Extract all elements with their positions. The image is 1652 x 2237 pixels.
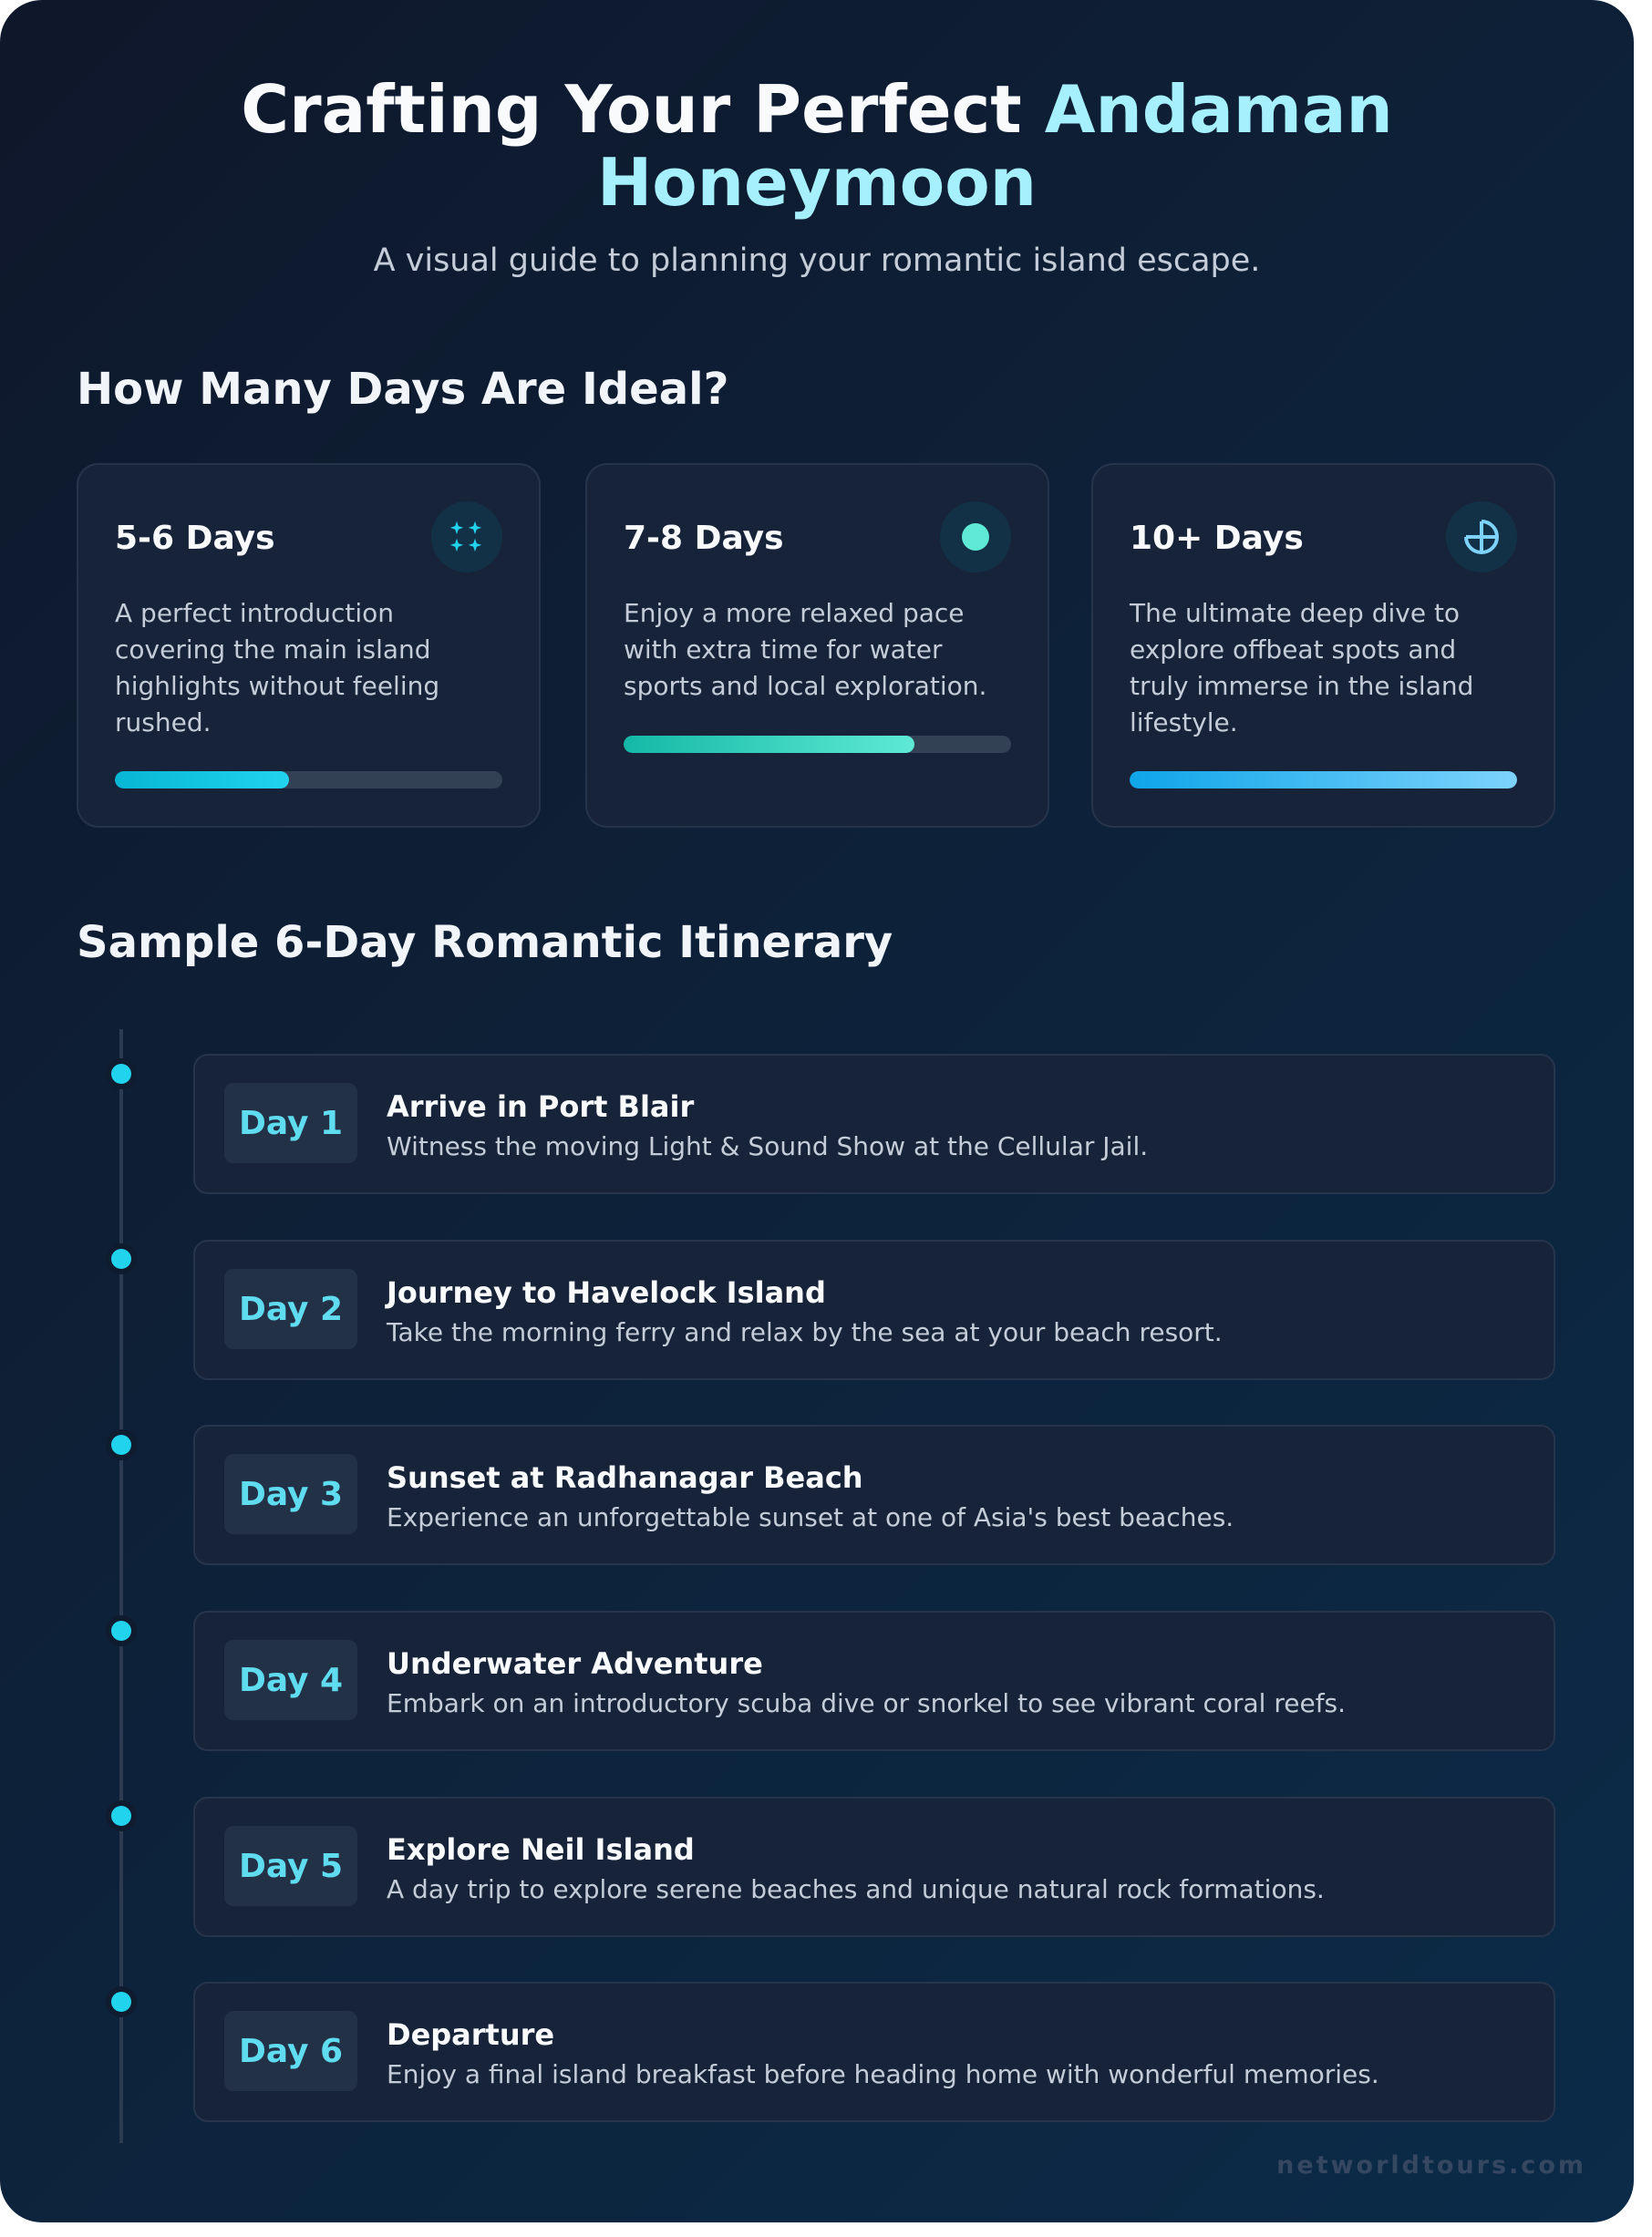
day 6: Day 6 [239, 2033, 343, 2069]
dot 5 [111, 1806, 131, 1826]
progress bar [624, 736, 1011, 753]
day 6: Departure [387, 2017, 554, 2052]
day 3: Day 3 [239, 1475, 343, 1513]
panel: 7-8 days: Enjoy a more relaxed pace with extra time for water sports and local exploration. [624, 598, 986, 701]
day 1 [193, 1054, 1555, 1194]
icon: sparkles [431, 501, 502, 572]
day 1: Day 1 [239, 1105, 343, 1141]
panel: 5-6 days: A perfect introduction covering the main island highlights without feeling rushed. [115, 598, 439, 737]
day 1: Arrive in Port Blair [387, 1089, 694, 1124]
day 5: A day trip to explore serene beaches and unique natural rock formations. [387, 1874, 1325, 1904]
footer: networldtours.com [1276, 2151, 1586, 2180]
title: Crafting Your Perfect Andaman [241, 71, 1393, 148]
icon: globe [1446, 501, 1517, 572]
dot 4 [111, 1621, 131, 1641]
progress bar [115, 771, 502, 789]
day 6 [193, 1982, 1555, 2122]
day 5: Explore Neil Island [387, 1832, 695, 1867]
day 6: Enjoy a final island breakfast before heading home with wonderful memories. [387, 2059, 1379, 2089]
panel: 7-8 days: 7-8 Days [624, 520, 784, 557]
day 1: Witness the moving Light & Sound Show at the Cellular Jail. [387, 1131, 1148, 1161]
timeline line [119, 1029, 123, 2143]
day 3: Sunset at Radhanagar Beach [387, 1460, 863, 1495]
day 2: Take the morning ferry and relax by the sea at your beach resort. [387, 1317, 1223, 1347]
panel: 5-6 days: 5-6 Days [115, 520, 275, 557]
panel: 10+ days: 10+ Days [1130, 520, 1304, 557]
panel: 5-6 days [77, 463, 541, 828]
day 2: Day 2 [239, 1291, 343, 1327]
icon: circle [940, 501, 1011, 572]
heading: how many days: How Many Days Are Ideal? [77, 364, 728, 415]
dot 2 [111, 1249, 131, 1269]
panel: 7-8 days [585, 463, 1049, 828]
day 2 [193, 1240, 1555, 1380]
day 5: Day 5 [239, 1847, 343, 1885]
panel: 10+ days: The ultimate deep dive to explore offbeat spots and truly immerse in the island lifestyle. [1130, 598, 1473, 737]
dot 6 [111, 1992, 131, 2012]
panel: 10+ days [1091, 463, 1555, 828]
progress bar [1130, 771, 1517, 789]
day 5 [193, 1797, 1555, 1937]
dot 3 [111, 1435, 131, 1455]
subtitle: A visual guide to planning your romantic island escape. [374, 242, 1260, 279]
dot 1 [111, 1064, 131, 1084]
day 3 [193, 1425, 1555, 1565]
day 2: Journey to Havelock Island [387, 1275, 826, 1310]
day 4: Underwater Adventure [387, 1646, 763, 1681]
day 3: Experience an unforgettable sunset at one of Asia's best beaches. [387, 1502, 1234, 1532]
day 4: Embark on an introductory scuba dive or snorkel to see vibrant coral reefs. [387, 1688, 1346, 1718]
title [241, 71, 1393, 221]
day 4 [193, 1611, 1555, 1751]
heading: itinerary: Sample 6-Day Romantic Itinerary [77, 917, 893, 968]
title: Honeymoon [597, 144, 1037, 221]
day 4: Day 4 [239, 1661, 343, 1699]
